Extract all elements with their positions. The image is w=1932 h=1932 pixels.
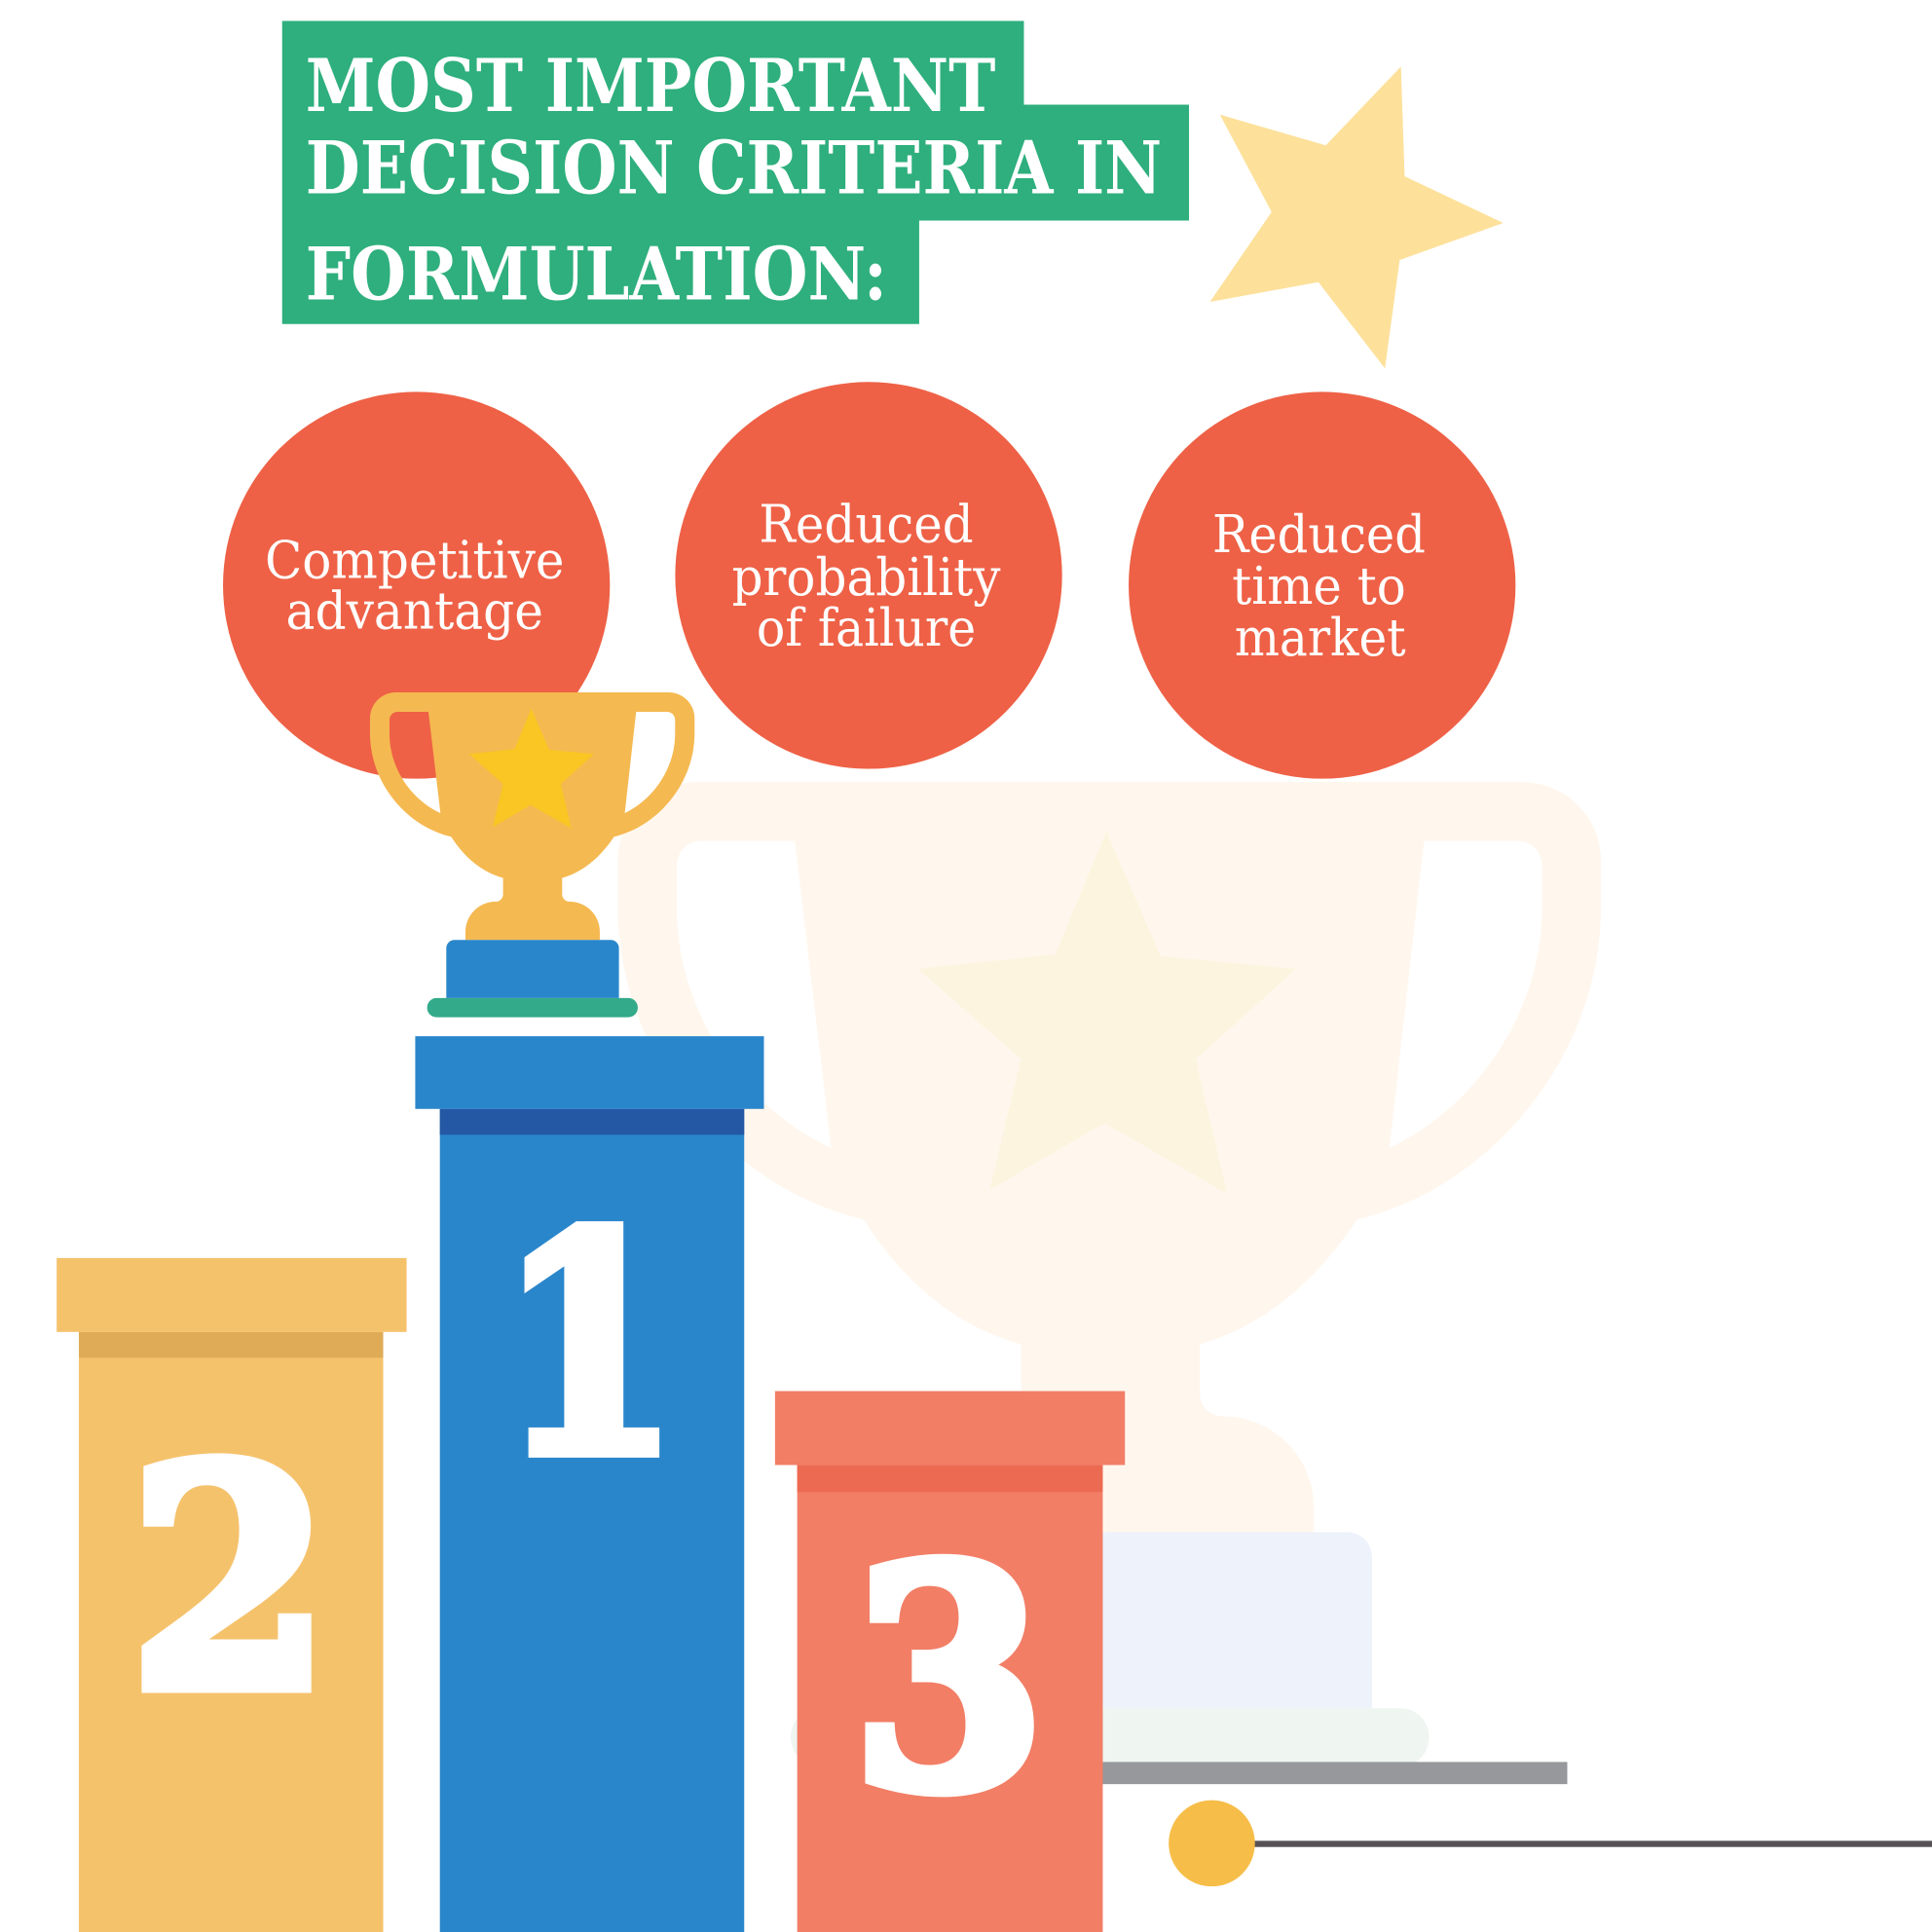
podium floor bar bbox=[863, 1762, 1567, 1784]
criterion circle: reduced time to market: time to bbox=[1232, 556, 1406, 616]
icon: gold trophy bbox=[370, 692, 694, 1018]
criterion circle: reduced probability of failure: of failure bbox=[757, 598, 976, 658]
criterion circle: competitive advantage: Competitive bbox=[265, 530, 565, 590]
background faint trophy bbox=[617, 782, 1601, 1766]
title banner: FORMULATION: bbox=[306, 231, 887, 316]
icon: decorative star bbox=[1210, 66, 1504, 368]
podium: first place: 1 bbox=[498, 1170, 680, 1524]
podium: first place bbox=[415, 1036, 763, 1932]
criterion circle: competitive advantage bbox=[223, 391, 610, 779]
criterion circle: competitive advantage: advantage bbox=[286, 580, 543, 641]
podium: second place bbox=[56, 1258, 407, 1932]
criterion circle: reduced probability of failure bbox=[675, 382, 1062, 769]
criterion circle: reduced time to market bbox=[1129, 391, 1515, 779]
podium: third place: 3 bbox=[853, 1503, 1045, 1857]
timeline marker and line bbox=[1169, 1801, 1932, 1886]
criterion circle: reduced time to market: market bbox=[1235, 608, 1406, 668]
criterion circle: reduced time to market: Reduced bbox=[1212, 504, 1426, 565]
podium: third place bbox=[775, 1392, 1125, 1932]
title banner: DECISION CRITERIA IN bbox=[306, 126, 1162, 211]
title banner: MOST IMPORTANT bbox=[306, 43, 995, 129]
podium: second place: 2 bbox=[130, 1402, 330, 1758]
title banner bbox=[282, 21, 1189, 324]
criterion circle: reduced probability of failure: probability bbox=[732, 547, 1000, 608]
criterion circle: reduced probability of failure: Reduced bbox=[759, 495, 974, 555]
